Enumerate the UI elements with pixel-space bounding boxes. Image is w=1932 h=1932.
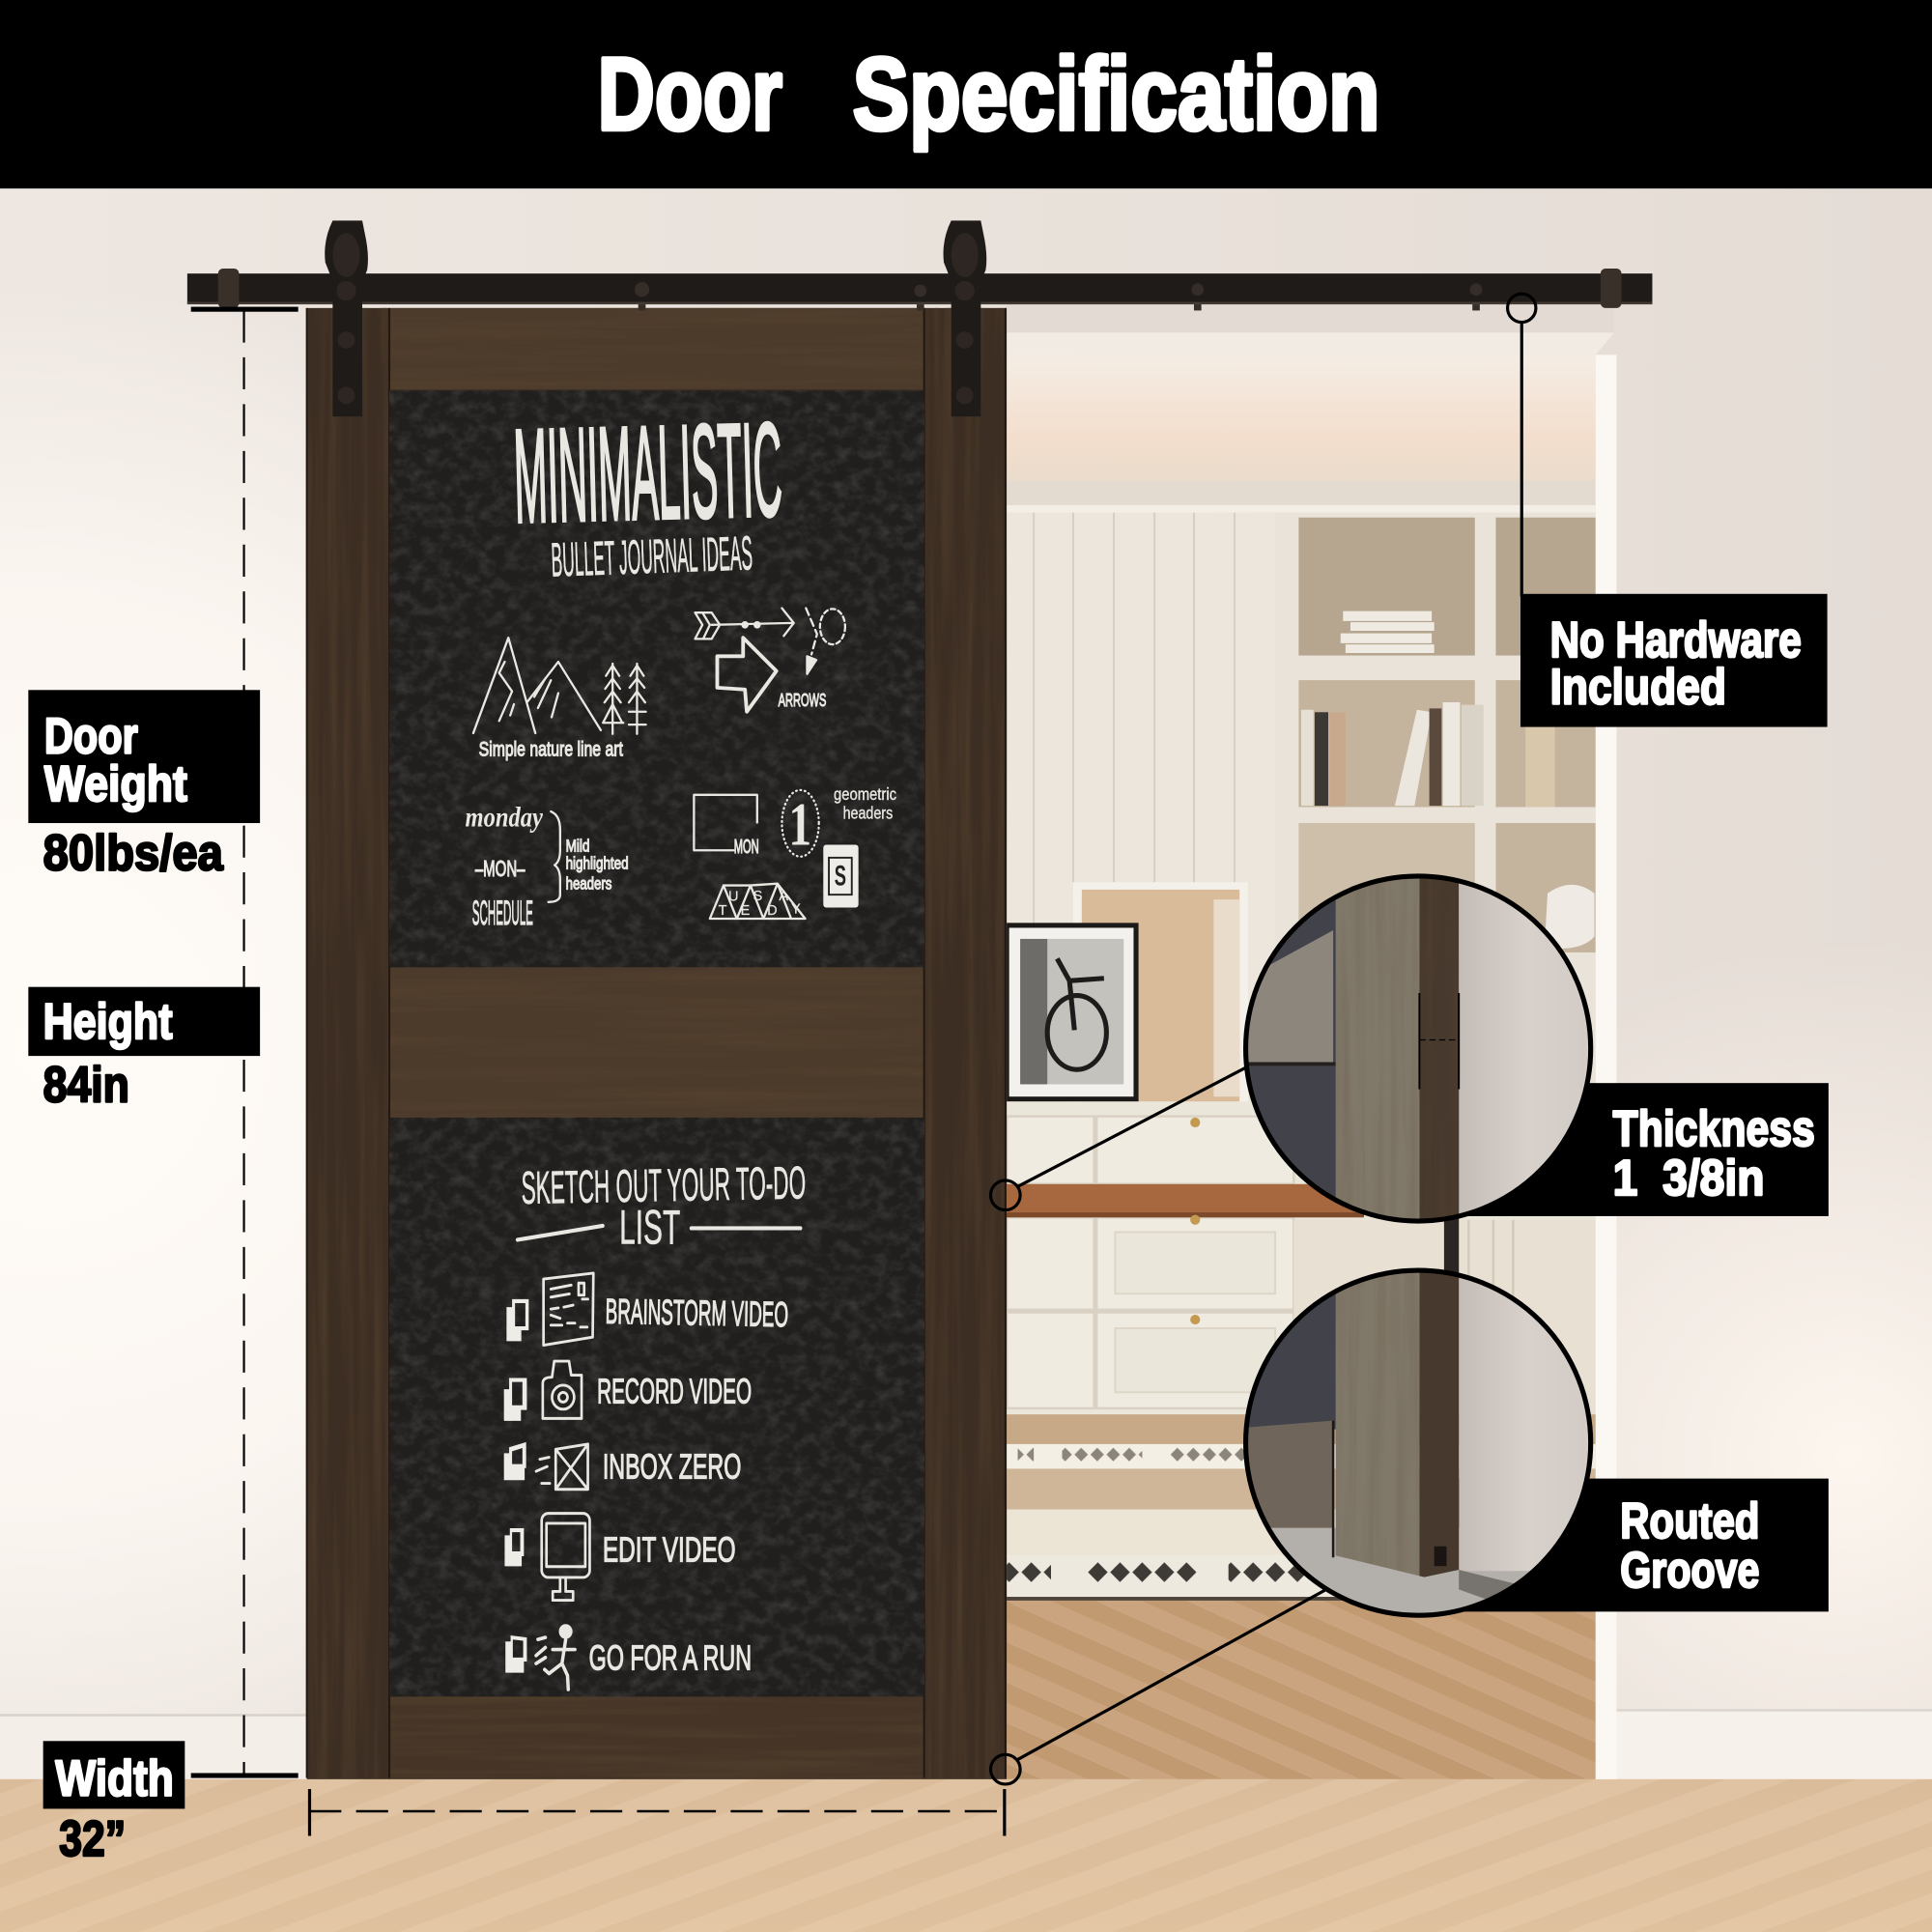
icon: arrows — [696, 609, 845, 712]
chalk heading: sketch out your to-do list: SKETCH OUT YOUR TO-DO — [521, 1156, 807, 1213]
icon: camera — [543, 1361, 582, 1418]
value: door weight: 80lbs/ea — [43, 826, 224, 882]
label text: no hardware: No Hardware — [1550, 612, 1802, 668]
checkboxes — [504, 1299, 528, 1673]
chalk bunting: tuesday: T — [719, 903, 727, 919]
chalk drawing: minimalistic bullet journal: BULLET JOURNAL IDEAS — [551, 526, 753, 587]
detail lens: door thickness — [1238, 868, 1595, 1226]
label box: routed groove — [1454, 1479, 1829, 1611]
label: height — [28, 987, 260, 1056]
icon: envelope — [536, 1444, 588, 1490]
barn door — [307, 308, 1007, 1779]
chalk heading: sketch out your to-do list: LIST — [619, 1202, 680, 1255]
chalk header box with mon: MON — [734, 837, 759, 858]
chalk bunting: tuesday — [710, 884, 806, 919]
chalk caption: arrows: ARROWS — [779, 690, 826, 710]
to-do text: record video: RECORD VIDEO — [597, 1372, 752, 1411]
chalk bunting: tuesday: U — [728, 890, 738, 905]
label text: height: Height — [43, 994, 173, 1050]
label text: thickness: Thickness — [1613, 1101, 1815, 1157]
track stops — [218, 269, 1622, 308]
chalk drawing: minimalistic bullet journal — [466, 395, 896, 932]
title bar — [0, 0, 1932, 188]
label text: groove: Groove — [1620, 1543, 1759, 1599]
wooden floor — [0, 1779, 1932, 1932]
label text: routed: Routed — [1620, 1493, 1759, 1549]
chalkboard panel top — [389, 390, 924, 967]
chalk caption: mild highlighted headers — [566, 836, 629, 893]
chalk bunting: tuesday: S — [753, 889, 763, 904]
title word: door: Door — [598, 36, 782, 152]
door frame reveal — [1596, 355, 1616, 1779]
door rails — [307, 308, 1006, 1778]
chalk drawing: to-do list — [504, 1156, 807, 1690]
value: width: 32” — [59, 1811, 126, 1867]
callout leader lines — [991, 294, 1536, 1784]
chalk drawing: minimalistic bullet journal: SCHEDULE — [472, 895, 533, 932]
chalk hand lettering: monday: monday — [466, 801, 543, 833]
label: no hardware included — [1520, 594, 1828, 727]
label text: included: Included — [1550, 659, 1726, 715]
chalk header box with mon — [694, 795, 759, 858]
sliding track hardware — [187, 220, 1652, 416]
icon: mountains and trees — [473, 638, 646, 734]
label text: width: Width — [55, 1750, 174, 1806]
cabinets — [1007, 1101, 1596, 1417]
right hanger strap — [944, 220, 986, 416]
label text: weight: Weight — [44, 756, 187, 812]
chalk heading: sketch out your to-do list — [518, 1156, 807, 1255]
chalk lettering: mon: –MON– — [475, 856, 526, 881]
icon: runner — [536, 1626, 575, 1690]
chalk badge S: S — [835, 861, 846, 893]
chalk brace — [549, 811, 560, 902]
room floor and rug — [1007, 1414, 1596, 1779]
to-do text: go for a run: GO FOR A RUN — [589, 1638, 752, 1678]
chalk badge S — [823, 844, 859, 908]
to-do text: inbox zero: INBOX ZERO — [603, 1447, 741, 1487]
value: height: 84in — [43, 1057, 129, 1113]
room seen through the door opening — [1007, 332, 1616, 1779]
chalk bunting: tuesday: A — [779, 889, 788, 904]
chalk bunting: tuesday: Y — [791, 901, 801, 917]
width dimension line — [308, 1789, 1006, 1836]
label: door weight — [28, 690, 260, 823]
chalk caption: mild highlighted headers: Mild — [566, 836, 589, 855]
text: MINIMALISTIC — [512, 395, 783, 552]
chalkboard panel bottom — [389, 1118, 924, 1696]
label text: door: Door — [44, 708, 138, 764]
chalk caption: geometric headers — [834, 784, 896, 823]
icon: planning board — [544, 1273, 593, 1346]
chalk dotted numeral: 1 — [788, 790, 811, 858]
detail lens: routed groove — [1238, 1263, 1596, 1633]
track bolts — [635, 282, 1482, 310]
chalk caption: geometric headers: geometric — [834, 784, 896, 804]
label: width — [43, 1741, 185, 1808]
chalk caption: nature line art: Simple nature line art — [479, 739, 623, 761]
track rail — [187, 273, 1652, 304]
chalk caption: mild highlighted headers: headers — [566, 873, 611, 893]
label box: thickness — [1454, 1083, 1829, 1216]
left hanger strap — [325, 220, 368, 416]
height dimension line — [191, 307, 298, 1778]
chalk bunting: tuesday: D — [767, 903, 778, 919]
icon: monitor — [542, 1514, 589, 1601]
label value: thickness: 1 3/8in — [1613, 1151, 1765, 1207]
bookshelf — [1275, 513, 1596, 1117]
chalk bunting: tuesday: E — [741, 903, 751, 919]
to-do text: brainstorm video: BRAINSTORM VIDEO — [605, 1292, 788, 1335]
framed art — [1007, 882, 1248, 1104]
title word: specification: Specification — [853, 36, 1380, 152]
chalk caption: mild highlighted headers: highlighted — [566, 853, 629, 872]
chalk caption: geometric headers: headers — [843, 804, 893, 823]
to-do text: edit video: EDIT VIDEO — [603, 1530, 736, 1570]
